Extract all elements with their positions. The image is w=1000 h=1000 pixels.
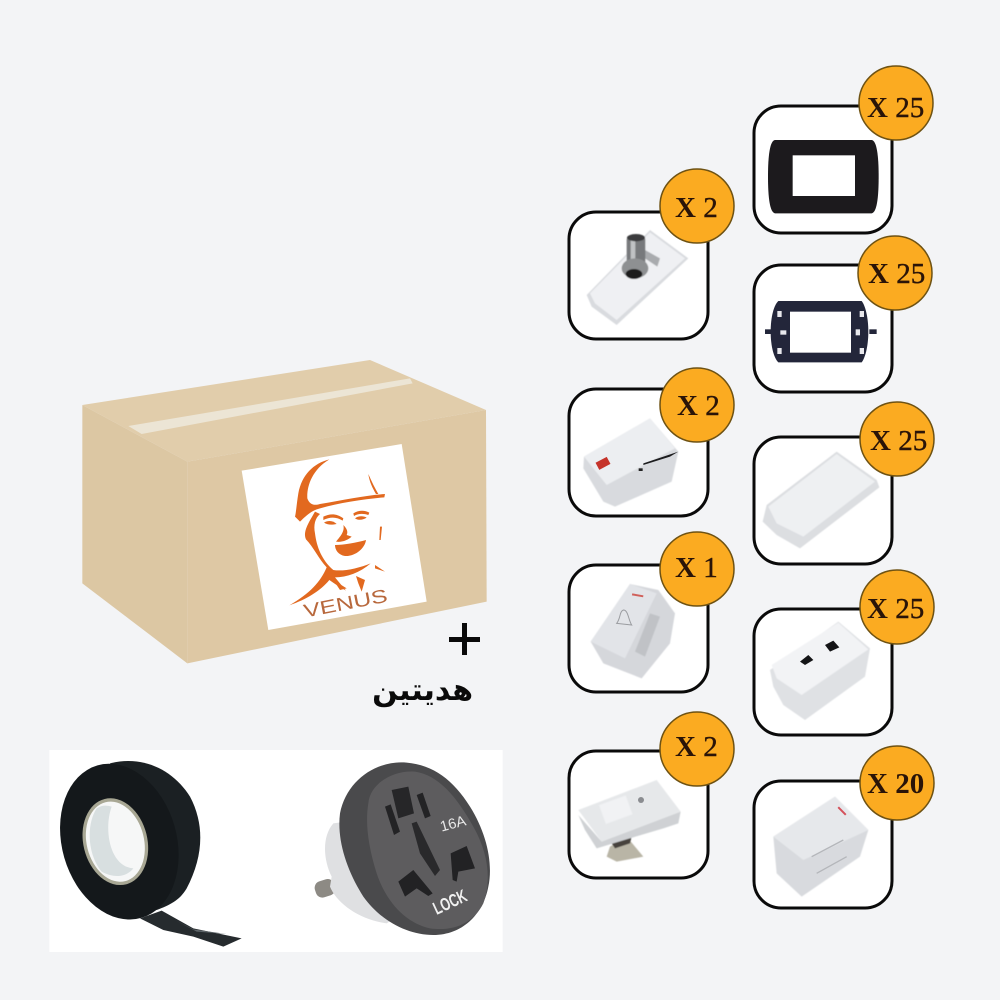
product card: switch x20 (754, 746, 934, 908)
icon: grey universal plug adapter: LOCK (430, 886, 470, 919)
quantity badge: X 25 (867, 92, 924, 124)
icon: power outlet (770, 622, 870, 720)
product card: data socket x2 (569, 712, 734, 878)
icon: black electrical tape (42, 750, 242, 947)
icon: blank module (763, 452, 879, 548)
quantity badge (859, 66, 933, 140)
icon: data socket (578, 780, 681, 862)
box left face (82, 405, 187, 663)
icon: coaxial socket (587, 230, 688, 325)
icon: light switch (773, 797, 868, 897)
icon: grey universal plug adapter (313, 762, 490, 935)
quantity badge (860, 570, 934, 644)
product card: mounting frame x25 (754, 236, 932, 392)
packing tape (128, 378, 413, 434)
icon: grey universal plug adapter: 16A (439, 813, 468, 836)
label (242, 444, 427, 630)
quantity badge: X 1 (675, 552, 718, 584)
quantity badge (858, 236, 932, 310)
quantity badge: X 20 (867, 768, 924, 800)
quantity badge: X 2 (675, 192, 718, 224)
product card: coaxial socket x2 (569, 169, 734, 339)
gifts panel background (49, 750, 503, 952)
quantity badge (660, 712, 734, 786)
logo wordmark: VENUS (302, 585, 389, 622)
quantity badge (660, 532, 734, 606)
icon: switch with indicator (583, 418, 678, 507)
icon: black cover plate (768, 140, 879, 213)
gifts label: هديتين (372, 673, 473, 708)
product card: bell switch x1 (569, 532, 734, 692)
quantity badge (860, 746, 934, 820)
quantity badge: X 2 (675, 731, 718, 763)
box top face (82, 360, 486, 462)
icon: black mounting frame (765, 301, 877, 362)
product card: switch with indicator x2 (569, 368, 734, 516)
quantity badge: X 25 (868, 258, 925, 290)
quantity badge (860, 402, 934, 476)
cardboard box with Venus label (82, 360, 487, 663)
product card: blank module x25 (754, 402, 934, 564)
quantity badge (660, 169, 734, 243)
logo: worker with helmet (289, 459, 385, 605)
product card: power outlet x25 (754, 570, 934, 735)
quantity badge: X 25 (870, 425, 927, 457)
quantity badge (660, 368, 734, 442)
panel: gifts (42, 750, 503, 952)
box front face (187, 410, 487, 663)
quantity badge: X 2 (677, 390, 720, 422)
icon: bell switch (591, 584, 675, 678)
product card: black cover plate x25 (754, 66, 933, 233)
plus sign (449, 623, 480, 655)
quantity badge: X 25 (867, 593, 924, 625)
